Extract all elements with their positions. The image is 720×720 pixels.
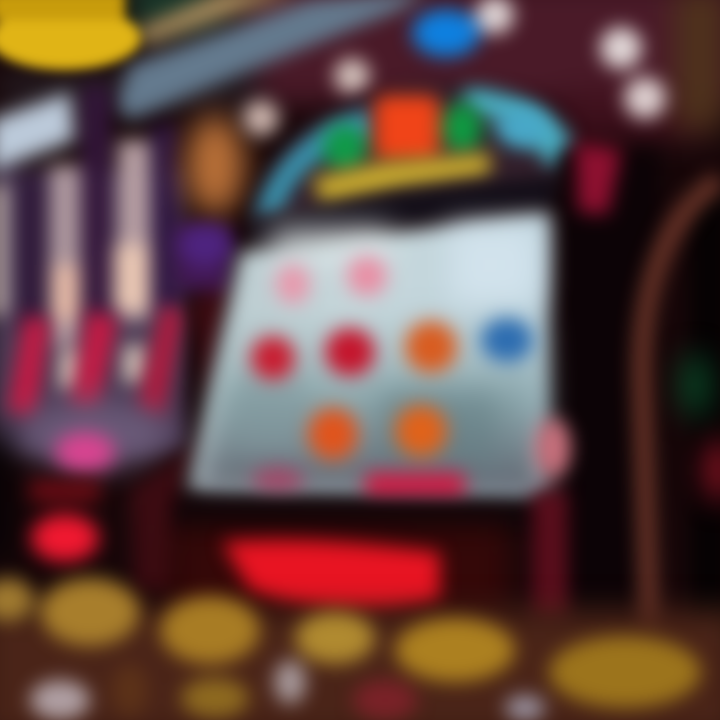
screen shading [195, 310, 548, 500]
right side cabinet [560, 142, 720, 650]
pink right accent [532, 418, 571, 620]
screen [190, 212, 550, 500]
coin bed [0, 610, 720, 720]
top wall [0, 0, 720, 140]
red button panel [222, 540, 440, 612]
reel symbols [251, 256, 533, 500]
yellow lamp [0, 0, 141, 70]
left light bands [0, 85, 185, 450]
bottom frame of screen [175, 500, 550, 532]
purple accent [179, 225, 231, 265]
gold lettering band [312, 152, 490, 205]
base of light column [0, 401, 173, 560]
ceiling beam [115, 0, 430, 120]
curved wood trim [642, 180, 720, 640]
right side hints [681, 353, 720, 502]
dark band beneath marquee [248, 176, 560, 245]
marquee arch [252, 84, 572, 225]
red glow lamp [30, 480, 100, 562]
control panel [170, 525, 510, 615]
arch body [252, 84, 572, 225]
arch panels [323, 95, 548, 172]
marquee lights [243, 0, 666, 136]
coins [0, 578, 701, 720]
machine left post [130, 225, 232, 590]
amber side lamp [185, 115, 245, 215]
arch rim [255, 110, 372, 218]
reel patches [230, 225, 540, 470]
pink glow [55, 432, 115, 472]
red ribbons [8, 305, 184, 420]
